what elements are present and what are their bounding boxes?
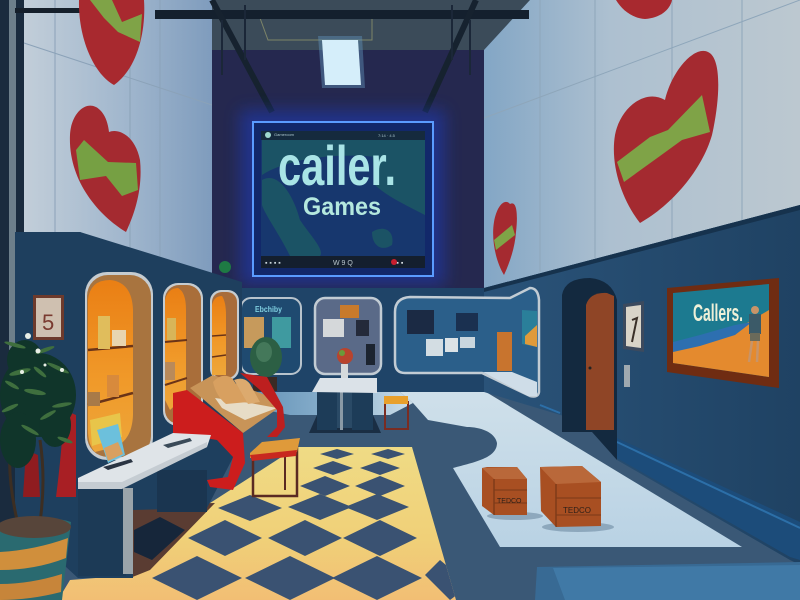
books [98,316,110,349]
niche: posters: Ebchiby [255,305,282,314]
crate left [482,467,543,520]
bottom bar: ▪ ▪ ▪ [392,260,404,267]
shelf niche 1 [85,272,153,460]
left column [0,0,24,600]
heart: top right [616,0,672,19]
foliage [0,340,76,468]
poster waves [673,310,769,377]
top bar: Gameroom [274,132,295,137]
ceiling centre [212,0,530,50]
left upper wall [24,0,212,285]
blue baseboard [617,438,800,560]
screen glow [240,110,445,285]
shelf niche 2 [163,283,203,426]
crate right [540,466,614,532]
bottom bar: W 9 Q [333,260,353,267]
map landmass [262,140,425,256]
centre table [309,378,381,433]
red bench [173,373,285,490]
trunks [10,440,43,522]
heart: small right [493,202,517,275]
orange stool [384,396,408,429]
poster title: Callers. [693,300,743,327]
floor shadow under table [130,503,215,578]
niche: display board [315,298,381,378]
poster figure [749,306,761,362]
light blue floor back section [240,392,413,415]
towels [215,398,277,420]
blue counter [535,562,800,600]
keypad [624,365,630,387]
framed number sign [33,295,64,340]
door [586,293,614,430]
red towels [23,410,76,497]
niche: gallery alcove [395,288,539,396]
title: Games: Games [303,193,381,221]
wood seat [190,375,280,433]
heart: top left [79,0,144,85]
right upper wall [484,0,800,288]
ceiling beams and pipes [15,0,529,112]
top bar: 7:14 · 4.5 [378,133,396,138]
red side panel [173,390,245,490]
long table [78,424,211,576]
red back [240,373,285,437]
lower back wall [238,288,488,396]
cushions [213,376,248,404]
niche: posters [241,298,301,374]
small framed art [623,301,644,352]
striped pot [0,516,71,600]
shelf niche 3 [210,290,239,380]
title: cailer: cailer. [278,134,396,197]
framed number sign: 5 [42,310,54,335]
framed poster [667,278,779,388]
crate right: TEDCO [563,506,591,515]
back wall [212,50,484,295]
right lower wall [484,205,800,565]
heart: large right [614,51,718,223]
map display [261,131,425,268]
left blue cabinet wall [15,232,242,578]
green ornament [219,261,231,273]
white floor [400,392,742,547]
bench stool [250,438,300,496]
plant by entrance [0,333,76,522]
crate left: TEDCO [497,498,522,505]
top bar [261,131,425,140]
bottom bar: ▪ ▪ ▪ ▪ [265,260,281,267]
potted plant by bench [250,337,282,391]
skylight [318,36,365,88]
blue diamonds [152,449,470,600]
brochure [97,424,125,463]
heart: left wall [70,106,141,232]
door alcove [562,278,617,460]
spotlight camera [118,8,136,40]
bottom bar [261,256,425,268]
neon screen [253,122,433,276]
checker floor [62,447,456,600]
